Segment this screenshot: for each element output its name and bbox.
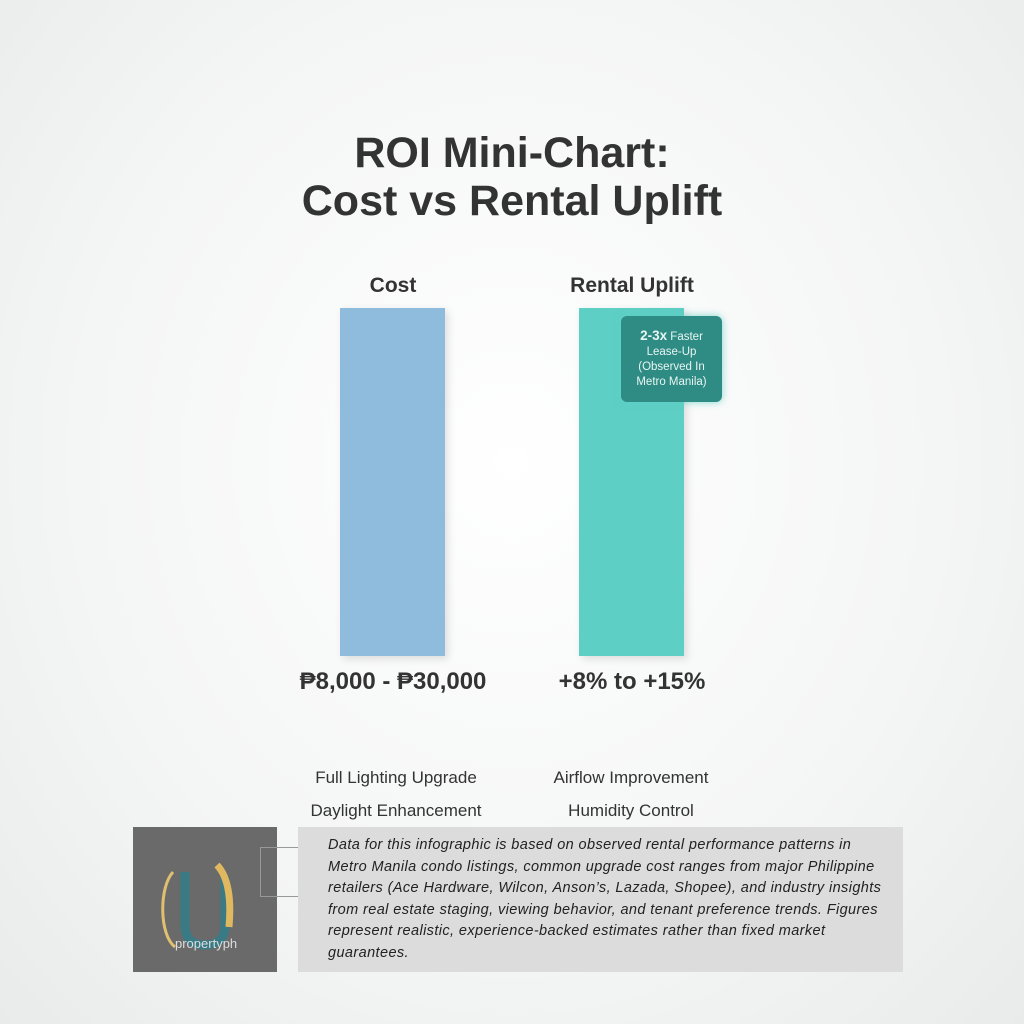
- list: uplift items: Humidity Control: [568, 801, 694, 820]
- title: Cost vs Rental Uplift: [302, 177, 722, 225]
- logo panel: [133, 827, 277, 972]
- label: rental uplift: Rental Uplift: [570, 274, 694, 297]
- callout: faster lease-up: Lease-Up: [647, 346, 696, 358]
- label: cost: Cost: [370, 274, 416, 297]
- bar: cost: [340, 308, 445, 656]
- source note: Metro Manila condo listings, common upgrade cost ranges from major Philippine: [328, 858, 875, 874]
- list: uplift items: [554, 768, 708, 820]
- callout: faster lease-up: Metro Manila): [636, 376, 707, 388]
- list: cost items: [310, 768, 482, 820]
- callout: faster lease-up: 2-3x Faster: [640, 328, 703, 343]
- source note: retailers (Ace Hardware, Wilcon, Anson’s, Lazada, Shopee), and industry insights: [328, 880, 881, 896]
- icon: propertyph logo: propertyph: [175, 936, 237, 951]
- connector box: [260, 847, 302, 897]
- list: uplift items: Airflow Improvement: [554, 768, 708, 787]
- source note: represent realistic, experience-backed estimates rather than fixed market: [328, 923, 825, 939]
- list: cost items: Full Lighting Upgrade: [315, 768, 477, 787]
- source note: from real estate staging, viewing behavior, and tenant preference trends. Figures: [328, 902, 878, 918]
- title: [302, 129, 722, 225]
- icon: propertyph logo: [161, 862, 237, 951]
- source note: Data for this infographic is based on observed rental performance patterns in: [328, 837, 851, 853]
- list: cost items: Daylight Enhancement: [310, 801, 482, 820]
- callout: faster lease-up: (Observed In: [638, 361, 705, 373]
- source note: [298, 827, 903, 972]
- source note: guarantees.: [328, 944, 409, 960]
- value: uplift: +8% to +15%: [559, 668, 705, 695]
- title: ROI Mini-Chart:: [354, 129, 670, 177]
- callout: faster lease-up: [621, 316, 722, 402]
- bar: rental uplift: [579, 308, 684, 656]
- value: cost: ₱8,000 - ₱30,000: [300, 668, 486, 695]
